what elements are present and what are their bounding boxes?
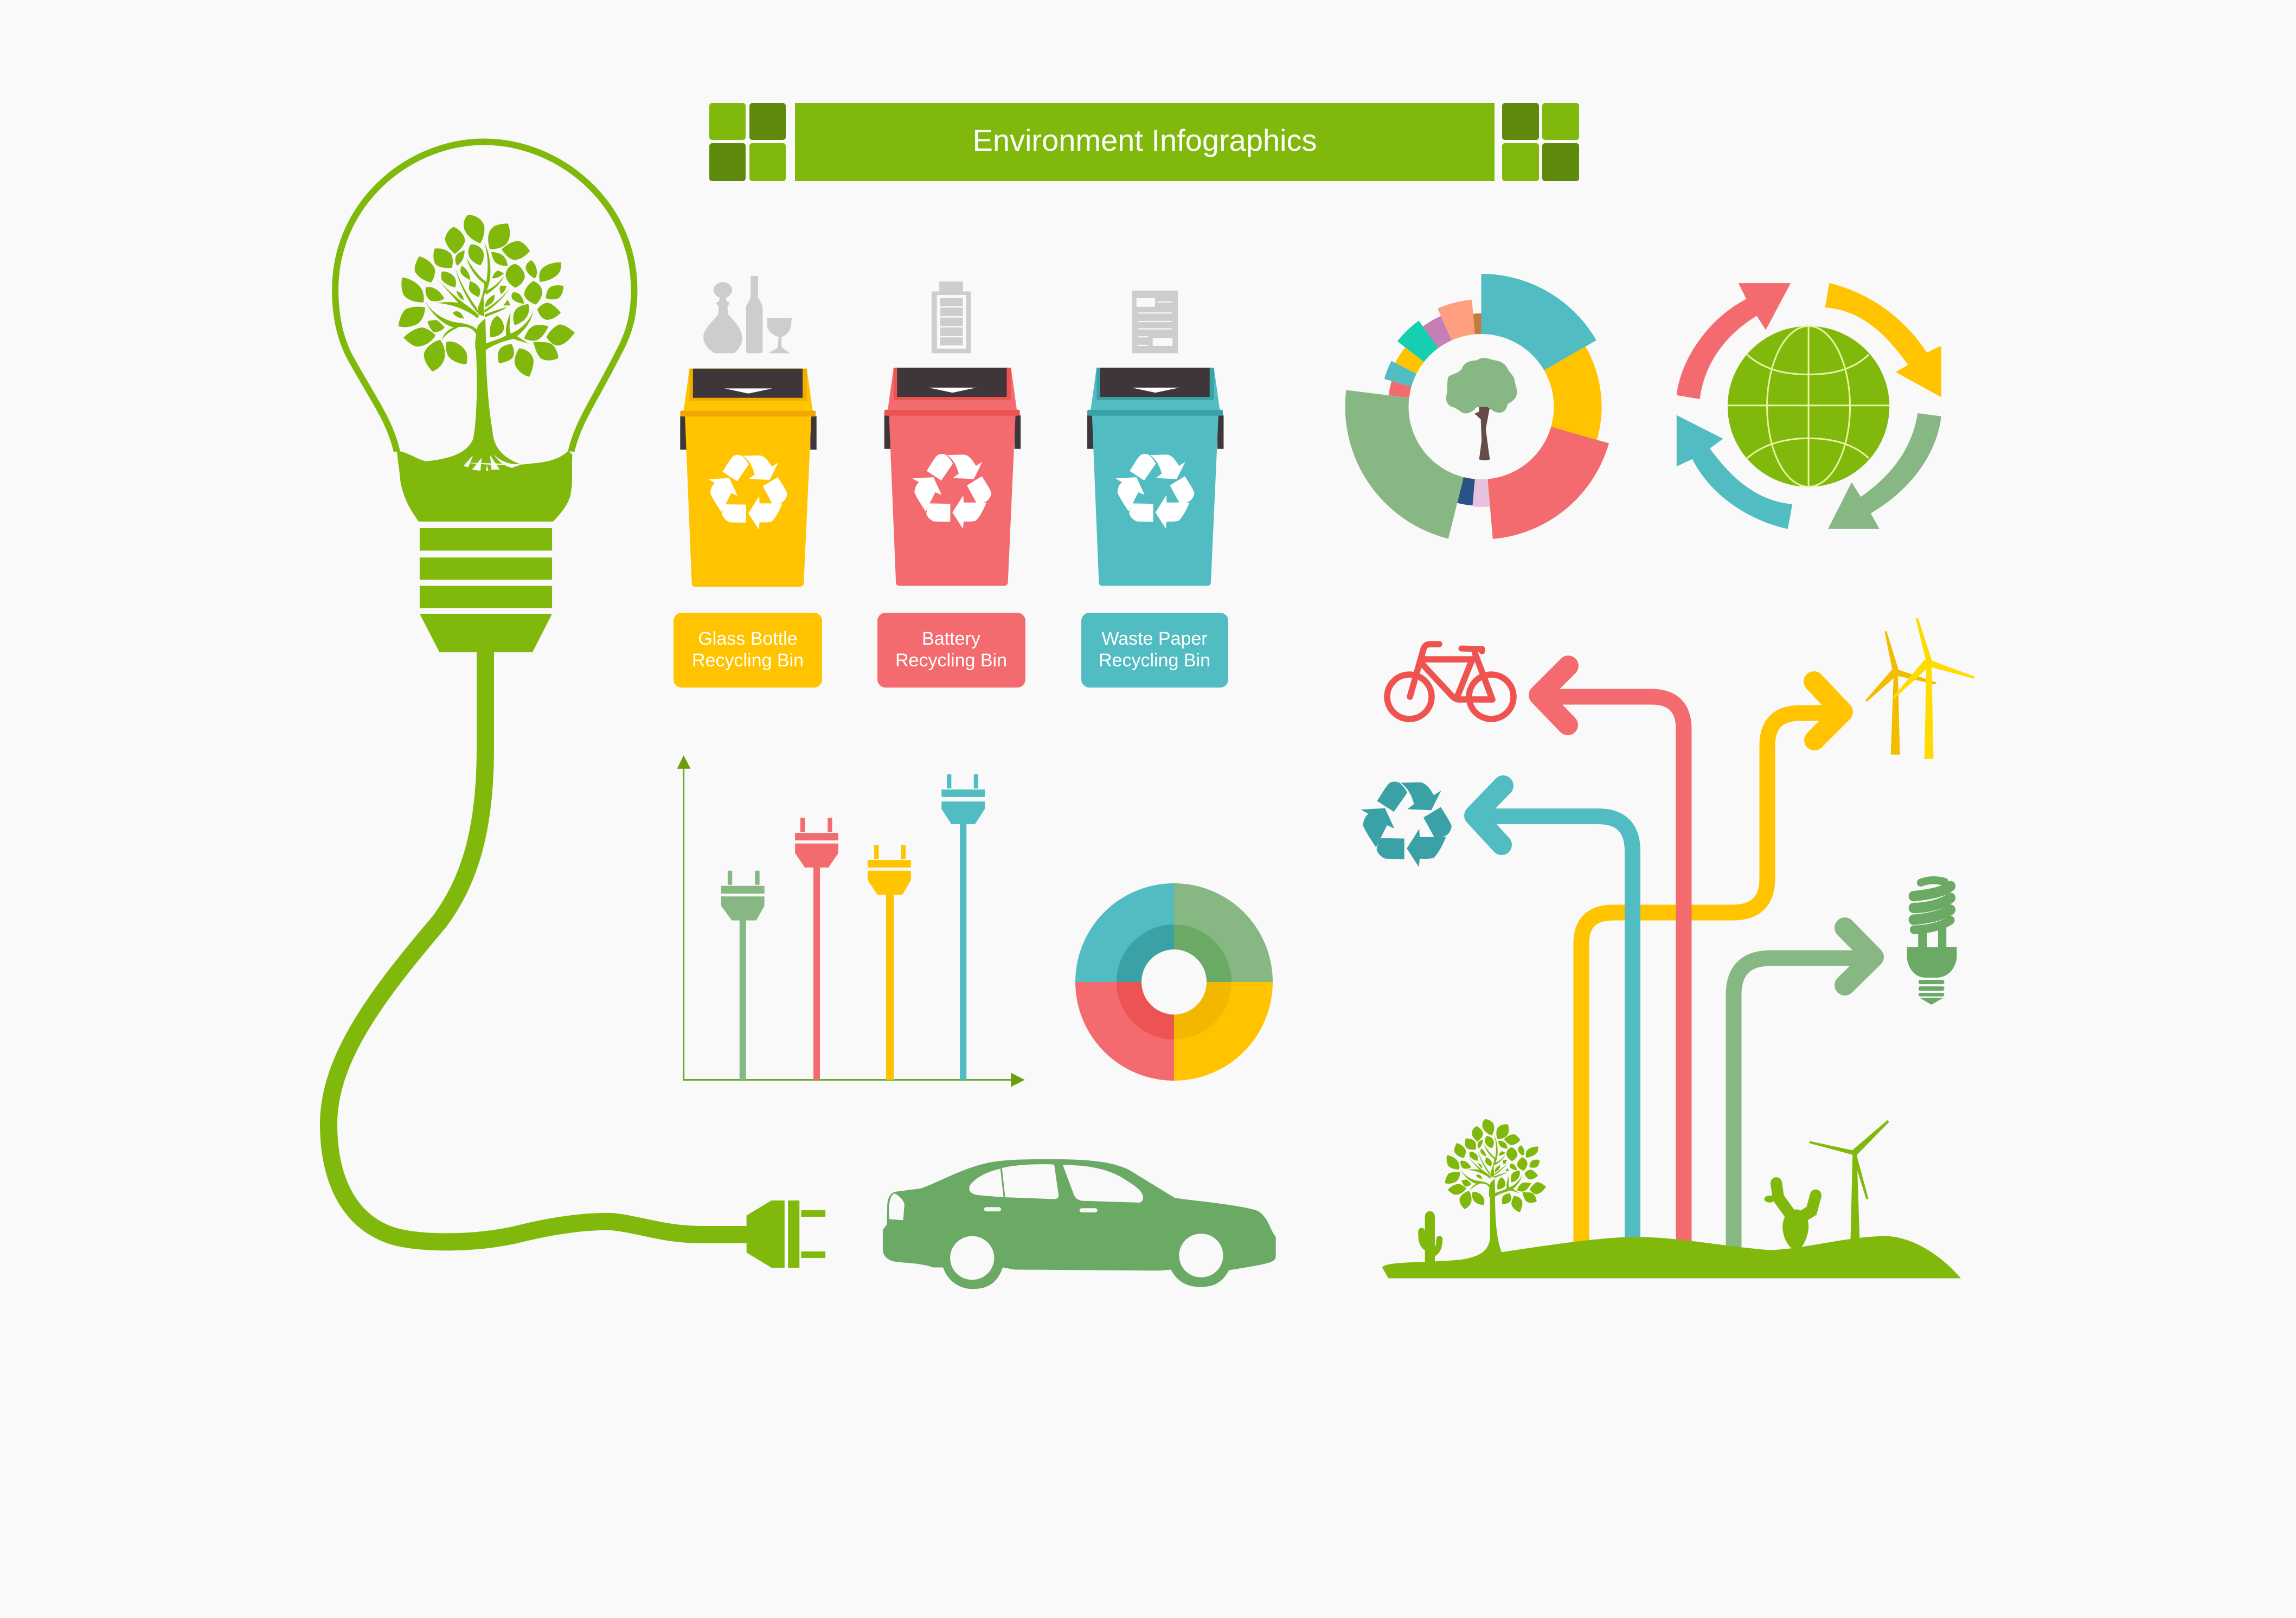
icon: recycle on teal bin [1115, 454, 1194, 529]
banner right squares [1502, 103, 1579, 181]
icon: wind turbines [1865, 618, 1974, 759]
cord [329, 651, 748, 1242]
globe [1728, 326, 1889, 487]
bin label: battery: Battery [922, 628, 980, 649]
banner left squares [709, 103, 786, 181]
wind turbine [1810, 1120, 1889, 1239]
cactus left [1421, 1216, 1439, 1261]
title text: Environment Infographics [972, 123, 1317, 157]
arrow: yellow to wind turbines [1581, 682, 1843, 1247]
arrow: teal [1677, 415, 1792, 529]
plug bar: sage [721, 871, 765, 1080]
recycling bins [680, 276, 1223, 587]
icon: glass bottles [703, 276, 792, 354]
cactus right [1764, 1183, 1816, 1248]
tree trunk [426, 337, 521, 464]
green car [883, 1159, 1276, 1289]
bin label: waste paper [1081, 613, 1228, 688]
radial chart with tree [1345, 274, 1609, 539]
bulb base stripes [420, 528, 552, 652]
turbine: amber [1865, 631, 1936, 755]
icon: waste paper [1132, 291, 1178, 354]
plug bar: coral [795, 818, 838, 1080]
title banner [709, 103, 1579, 181]
arrow: yellow [1825, 283, 1941, 397]
arrow: teal to recycle [1474, 786, 1632, 1247]
bin label: glass bottle [674, 613, 822, 688]
inner quarters [1117, 924, 1174, 982]
lamp neck and base [1907, 928, 1957, 1005]
spiral tube [1914, 880, 1951, 930]
radial segments [1482, 274, 1596, 407]
plug bar chart [677, 755, 1025, 1087]
flow arrows [1474, 666, 1874, 1247]
car windows, lights, wheels [889, 1164, 1223, 1280]
arrow: sage to bulb [1734, 928, 1874, 1247]
soil [397, 448, 573, 522]
bin label: battery [877, 613, 1025, 688]
bulb outline [335, 142, 634, 452]
outer quarters [1075, 883, 1174, 982]
bin label: glass bottle: Recycling Bin [692, 650, 804, 671]
bin label: glass bottle: Glass Bottle [698, 628, 798, 649]
teal bin [1087, 368, 1223, 586]
bin label: waste paper: Waste Paper [1101, 628, 1208, 649]
icon: recycle on yellow bin [708, 455, 787, 530]
icon: battery [932, 281, 971, 354]
icon: teal recycle [1361, 782, 1452, 867]
car body [883, 1159, 1276, 1289]
tree canopy [399, 215, 575, 377]
light bulb with tree [335, 142, 634, 652]
ground [1382, 1191, 1961, 1279]
bin label: battery: Recycling Bin [895, 650, 1007, 671]
plug bar: yellow [868, 845, 911, 1080]
icon: bicycle [1387, 644, 1513, 719]
arrow: coral to bicycle [1539, 666, 1684, 1247]
icon: energy-saving bulb [1907, 880, 1957, 1005]
arrow: sage [1828, 413, 1941, 529]
icon: recycle on coral bin [912, 454, 991, 529]
globe with cycle arrows [1677, 283, 1941, 529]
coral bin [884, 368, 1021, 586]
power cord and plug [329, 651, 825, 1268]
yellow bin [680, 369, 817, 587]
turbine: yellow [1893, 618, 1974, 759]
plug [747, 1200, 825, 1268]
bin label: waste paper: Recycling Bin [1099, 650, 1210, 671]
chart axes [677, 755, 1025, 1087]
root gaps [464, 454, 521, 471]
arrow: coral [1677, 283, 1791, 399]
plug bar: teal [941, 774, 985, 1080]
landscape [1382, 1119, 1961, 1279]
small tree canopy [1445, 1119, 1546, 1212]
quarter donut chart [1075, 883, 1273, 1081]
banner bar [795, 103, 1495, 181]
icon: tree [1446, 358, 1517, 460]
